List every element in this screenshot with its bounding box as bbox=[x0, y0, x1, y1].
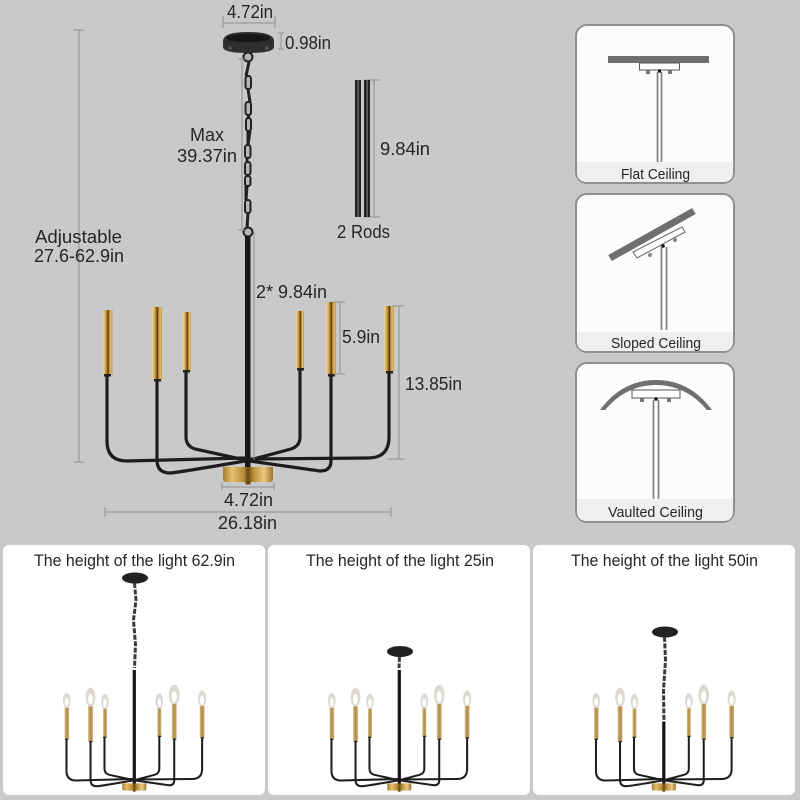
icon: flat ceiling mount bbox=[608, 56, 709, 162]
label: rods count: 2 Rods bbox=[337, 221, 390, 242]
chandelier at 25in bbox=[328, 646, 471, 792]
caption: Vaulted Ceiling bbox=[608, 505, 703, 521]
label: sleeve height: 5.9in bbox=[342, 326, 380, 347]
label: adjustable height: Adjustable bbox=[35, 226, 122, 247]
chandelier at 50in bbox=[592, 626, 736, 792]
label: rod length: 9.84in bbox=[380, 138, 430, 159]
diagram: main chandelier bbox=[103, 32, 394, 484]
canopy bbox=[223, 32, 274, 53]
caption: Sloped Ceiling bbox=[611, 336, 701, 352]
label: chain length value: 39.37in bbox=[177, 145, 237, 166]
chandelier at 62.9in bbox=[63, 572, 206, 792]
label: body height: 13.85in bbox=[405, 373, 462, 394]
chain bbox=[244, 52, 252, 236]
caption: Flat Ceiling bbox=[621, 167, 690, 183]
label: base width: 4.72in bbox=[224, 489, 273, 510]
label: adjustable height value: 27.6-62.9in bbox=[34, 245, 124, 266]
panel: flat ceiling bbox=[576, 25, 734, 183]
icon: vaulted ceiling mount bbox=[600, 380, 712, 499]
panel: vaulted ceiling bbox=[576, 363, 734, 522]
panel: height 25in bbox=[268, 545, 530, 795]
label: overall width: 26.18in bbox=[218, 512, 277, 533]
panel: height 62.9in bbox=[3, 545, 265, 795]
label: center rods: 2* 9.84in bbox=[256, 281, 327, 302]
label: chain length: Max bbox=[190, 124, 225, 145]
center rod bbox=[245, 236, 250, 470]
arms bbox=[107, 369, 389, 473]
label: canopy height: 0.98in bbox=[285, 32, 331, 53]
brass base bbox=[223, 467, 273, 484]
heading: The height of the light 50in bbox=[571, 552, 758, 570]
icon: spare rods bbox=[355, 80, 370, 217]
heading: The height of the light 62.9in bbox=[34, 552, 235, 570]
label: canopy width: 4.72in bbox=[227, 1, 273, 22]
panel: sloped ceiling bbox=[576, 194, 734, 352]
heading: The height of the light 25in bbox=[306, 552, 494, 570]
panel: height 50in bbox=[533, 545, 795, 795]
icon: sloped ceiling mount bbox=[610, 211, 694, 332]
candle sleeves bbox=[103, 302, 394, 382]
dimension lines bbox=[74, 16, 404, 517]
